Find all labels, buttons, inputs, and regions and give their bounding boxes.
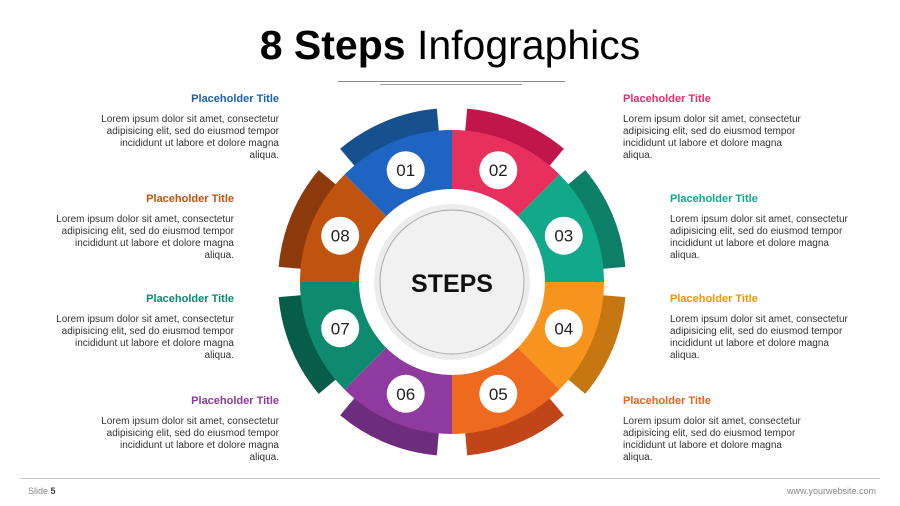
step numbers: 08: [331, 227, 350, 246]
text: step 01: incididunt ut labore et dolore magna: [120, 138, 279, 149]
text: step 01: Lorem ipsum dolor sit amet, consectetur: [101, 114, 279, 125]
text: step 01: Placeholder Title: [191, 93, 279, 105]
text: step 06: aliqua.: [250, 452, 279, 463]
text: step 02: incididunt ut labore et dolore magna: [623, 138, 782, 149]
step numbers: 04: [554, 319, 573, 338]
text: step 07: Placeholder Title: [146, 293, 234, 305]
text: step 07: [56, 293, 234, 361]
step numbers: [321, 151, 583, 413]
text: step 03: [670, 193, 848, 261]
step numbers: 07: [331, 319, 350, 338]
text: step 06: incididunt ut labore et dolore magna: [120, 440, 279, 451]
text: step 03: incididunt ut labore et dolore magna: [670, 238, 829, 249]
text: step 05: incididunt ut labore et dolore magna: [623, 440, 782, 451]
step numbers: 02: [489, 161, 508, 180]
title: 8 Steps Infographics: [260, 22, 640, 68]
step numbers: 06: [396, 385, 415, 404]
text: step 02: Lorem ipsum dolor sit amet, consectetur: [623, 114, 801, 125]
text: step 03: Placeholder Title: [670, 193, 758, 205]
text: step 02: aliqua.: [623, 150, 652, 161]
text: step 06: Lorem ipsum dolor sit amet, consectetur: [101, 416, 279, 427]
text: step 07: incididunt ut labore et dolore magna: [75, 338, 234, 349]
text: step 02: adipisicing elit, sed do eiusmod tempor: [623, 126, 795, 137]
text: step 04: Placeholder Title: [670, 293, 758, 305]
step numbers: 01: [396, 161, 415, 180]
text: step 01: [101, 93, 279, 161]
text: step 07: aliqua.: [205, 350, 234, 361]
step numbers: 03: [554, 227, 573, 246]
text: step 06: [101, 395, 279, 463]
text: step 08: incididunt ut labore et dolore magna: [75, 238, 234, 249]
text: step 05: [623, 395, 801, 463]
text: step 08: Placeholder Title: [146, 193, 234, 205]
text: step 08: adipisicing elit, sed do eiusmod tempor: [62, 226, 234, 237]
text: step 02: [623, 93, 801, 161]
text: step 03: Lorem ipsum dolor sit amet, consectetur: [670, 214, 848, 225]
text: step 04: aliqua.: [670, 350, 699, 361]
text: step 07: adipisicing elit, sed do eiusmod tempor: [62, 326, 234, 337]
text: step 07: Lorem ipsum dolor sit amet, consectetur: [56, 314, 234, 325]
text: step 04: Lorem ipsum dolor sit amet, consectetur: [670, 314, 848, 325]
step numbers: 05: [489, 385, 508, 404]
text: step 02: Placeholder Title: [623, 93, 711, 105]
footer: website: www.yourwebsite.com: [787, 486, 876, 496]
center label: STEPS: [411, 270, 493, 298]
text: step 04: incididunt ut labore et dolore magna: [670, 338, 829, 349]
text: step 08: Lorem ipsum dolor sit amet, consectetur: [56, 214, 234, 225]
text: step 08: [56, 193, 234, 261]
text: step 08: aliqua.: [205, 250, 234, 261]
text: step 05: adipisicing elit, sed do eiusmod tempor: [623, 428, 795, 439]
text: step 05: Lorem ipsum dolor sit amet, consectetur: [623, 416, 801, 427]
footer: slide number: Slide 5: [28, 486, 56, 496]
text: step 05: aliqua.: [623, 452, 652, 463]
text: step 03: adipisicing elit, sed do eiusmod tempor: [670, 226, 842, 237]
text: step 01: aliqua.: [250, 150, 279, 161]
text: step 04: adipisicing elit, sed do eiusmod tempor: [670, 326, 842, 337]
text: step 05: Placeholder Title: [623, 395, 711, 407]
text: step 01: adipisicing elit, sed do eiusmod tempor: [107, 126, 279, 137]
text: step 03: aliqua.: [670, 250, 699, 261]
text: step 04: [670, 293, 848, 361]
text: step 06: Placeholder Title: [191, 395, 279, 407]
text: step 06: adipisicing elit, sed do eiusmod tempor: [107, 428, 279, 439]
